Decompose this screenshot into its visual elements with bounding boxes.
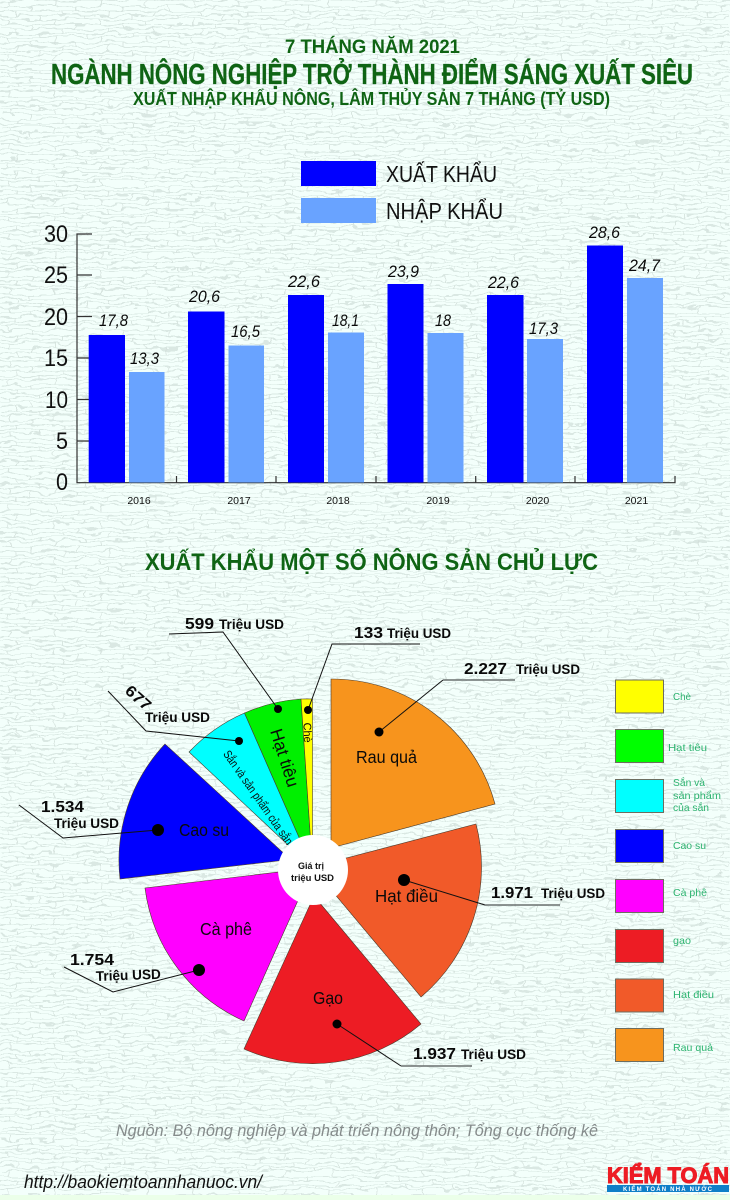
slice: gạo [244, 896, 421, 1064]
bar values: 18,1 [332, 311, 359, 330]
bar values: 24,7 [628, 256, 661, 275]
bars: xuất khẩu [89, 246, 623, 482]
slice labels: Cà phê [200, 919, 252, 939]
legend item: rau quả [616, 1028, 713, 1062]
slice: cà phê [145, 868, 312, 1021]
bar values: 18 [435, 311, 451, 330]
y axis labels: 0 [56, 469, 68, 496]
slice: rau quả [331, 679, 495, 848]
legend: bar chart [301, 160, 503, 224]
legend: bar chart: XUẤT KHẨU [386, 160, 497, 187]
callout: cao su 1.534 [19, 799, 164, 838]
legend item: sắn: của sắn [673, 801, 709, 814]
legend item: gạo: gạo [673, 935, 691, 947]
pie chart [119, 679, 495, 1064]
legend item: hạt tiêu: Hạt tiêu [668, 742, 707, 754]
year labels [127, 495, 648, 507]
bar values: 28,6 [588, 223, 621, 242]
callout: gạo 1.937 [332, 1020, 526, 1066]
slice: hạt điều [312, 824, 482, 997]
callout: rau quả 2.227: Triệu USD [516, 661, 580, 677]
bar values: 23,9 [387, 262, 420, 281]
callout: hạt điều 1.971: Triệu USD [541, 885, 605, 901]
chart subtitle: XUẤT NHẬP KHẨU NÔNG, LÂM THỦY SẢN 7 THÁNG (TỶ USD) [133, 88, 610, 109]
logo: kiểm toán: KIỂM TOÁN [607, 1163, 729, 1188]
kicker: 7 tháng năm 2021: 7 THÁNG NĂM 2021 [285, 36, 460, 58]
legend item: hạt điều [616, 979, 714, 1012]
logo: kiểm toán: KIỂM TOÁN NHÀ NƯỚC [623, 1185, 713, 1193]
legend item: cao su [616, 830, 706, 862]
callout: cao su 1.534: Triệu USD [54, 815, 119, 831]
website url: http://baokiemtoannhanuoc.vn/ [24, 1172, 264, 1192]
legend item: sắn: Sắn và [673, 776, 705, 789]
y axis labels: 25 [44, 262, 68, 289]
year labels: 2016 [127, 495, 151, 507]
y axis labels [44, 221, 68, 496]
bar values: 16,5 [231, 322, 260, 341]
slice labels: Hạt điều [375, 886, 438, 906]
legend: bar chart: NHẬP KHẨU [386, 197, 503, 224]
callout: cao su 1.534: 1.534 [41, 799, 84, 816]
slice labels: Hạt tiêu [266, 726, 303, 789]
callout: cà phê 1.754: 1.754 [70, 952, 114, 969]
slice labels: Gạo [313, 988, 343, 1008]
bar chart [44, 221, 675, 507]
bar values [99, 223, 661, 368]
bar values: 22,6 [487, 273, 520, 292]
legend: pie chart [616, 680, 721, 1062]
year labels: 2019 [426, 495, 450, 507]
source note: Nguồn: Bộ nông nghiệp và phát triển nông thôn; Tổng cục thống kê [116, 1121, 598, 1140]
year labels: 2020 [526, 495, 549, 507]
legend item: cà phê: Cà phê [673, 887, 707, 899]
slice labels: Sắn và sản phẩm của sắn [220, 747, 297, 847]
bar values: 20,6 [188, 287, 221, 306]
y axis labels: 5 [56, 428, 68, 455]
y axis labels: 20 [44, 304, 68, 331]
legend item: hạt điều: Hạt điều [673, 989, 714, 1001]
callout: cà phê 1.754: Triệu USD [96, 966, 161, 984]
callout: rau quả 2.227 [374, 661, 580, 736]
year labels: 2017 [227, 495, 251, 507]
callout: hạt điều 1.971 [398, 874, 605, 905]
legend item: cao su: Cao su [673, 840, 706, 852]
callout: gạo 1.937: Triệu USD [461, 1046, 526, 1062]
legend item: rau quả: Rau quả [673, 1042, 713, 1054]
y axis labels: 15 [44, 345, 68, 372]
slice: sắn [189, 713, 312, 868]
callout: chè 133 [304, 625, 451, 714]
center circle: triệu USD [291, 873, 334, 884]
legend item: chè: Chè [673, 691, 691, 703]
center circle [278, 835, 348, 905]
title block [51, 36, 693, 109]
legend item: gạo [616, 930, 691, 962]
center circle: Giá trị [298, 861, 324, 871]
callout: hạt tiêu 599: Triệu USD [219, 616, 284, 632]
bar values: 17,3 [529, 319, 558, 338]
legend item: cà phê [616, 880, 707, 912]
section heading: XUẤT KHẨU MỘT SỐ NÔNG SẢN CHỦ LỰC [145, 547, 598, 576]
year labels: 2018 [326, 495, 350, 507]
slice: chè [301, 699, 312, 868]
callout: sắn 677: Triệu USD [145, 709, 210, 725]
callout: hạt tiêu 599 [169, 616, 284, 713]
callout: chè 133: Triệu USD [387, 625, 451, 641]
legend item: sắn [616, 776, 721, 814]
callout: gạo 1.937: 1.937 [413, 1046, 456, 1063]
y axis labels: 30 [44, 221, 68, 248]
callout: hạt điều 1.971: 1.971 [491, 885, 533, 902]
bars: nhập khẩu [129, 278, 663, 482]
slice labels: Chè [301, 722, 313, 743]
year labels: 2021 [625, 495, 648, 507]
bar values: 13,3 [130, 349, 159, 368]
callout: cà phê 1.754 [64, 952, 205, 992]
legend item: chè [616, 680, 691, 713]
legend item: sắn: sản phẩm [673, 790, 721, 802]
callout: sắn 677: 677 [121, 682, 154, 714]
slice labels: Rau quả [356, 747, 417, 767]
axes [77, 234, 675, 483]
bar values: 17,8 [99, 311, 128, 330]
y axis labels: 10 [45, 387, 68, 414]
slice: hạt tiêu [244, 699, 312, 868]
slice labels: Cao su [179, 820, 229, 840]
callout: chè 133: 133 [354, 625, 383, 642]
callout: sắn 677 [108, 682, 243, 745]
callout: rau quả 2.227: 2.227 [464, 661, 507, 678]
legend item: hạt tiêu [616, 730, 707, 762]
slice labels [179, 722, 438, 1008]
callout: hạt tiêu 599: 599 [185, 616, 214, 633]
slice: cao su [119, 744, 291, 879]
bar values: 22,6 [287, 272, 321, 291]
